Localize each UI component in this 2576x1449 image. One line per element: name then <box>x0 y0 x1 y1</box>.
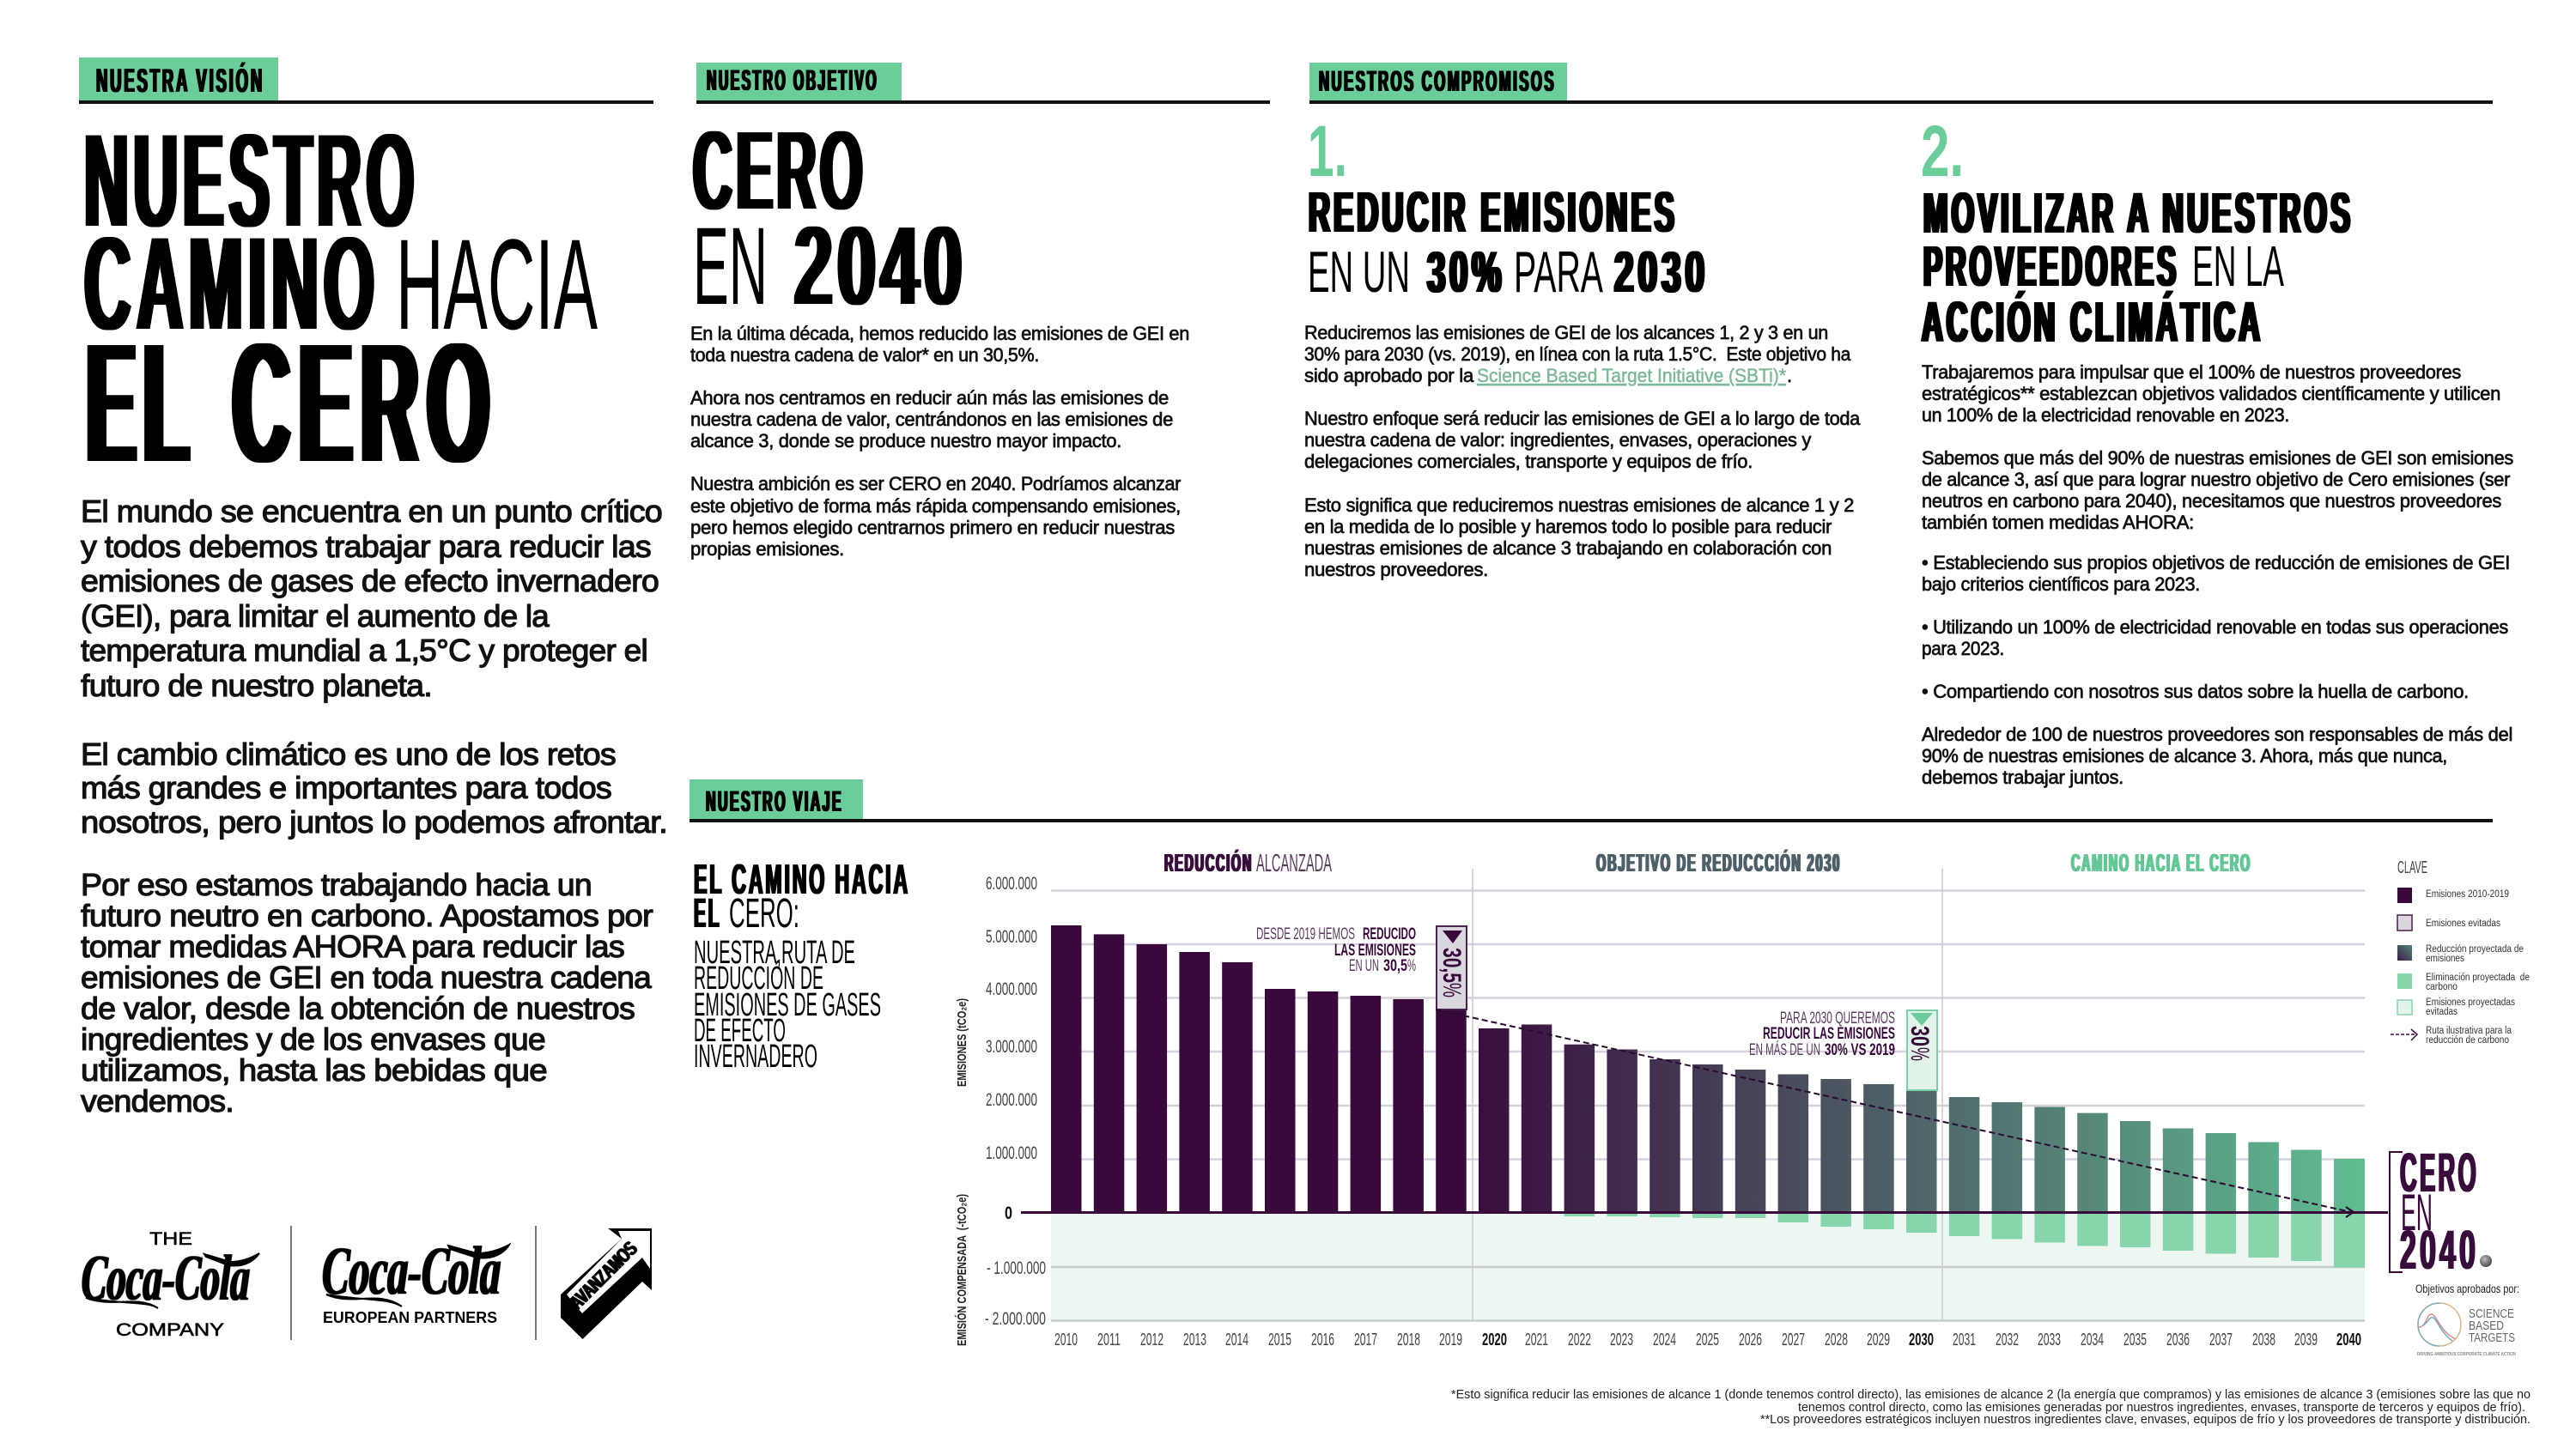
legend: reducción de carbono <box>2426 1035 2509 1046</box>
intro paragraphs: emisiones de GEI en toda nuestra cadena <box>81 960 653 995</box>
commitment 1 text: en la medida de lo posible y haremos todo lo posible para reducir <box>1304 516 1832 537</box>
footnotes: *Esto significa reducir las emisiones de alcance 1 (donde tenemos control directo), las emisiones de alcance 2 (la energía que compramos) y las emisiones de alcance 3 (emisiones sobre las que no <box>1451 1388 2530 1402</box>
commitment 2 text: también tomen medidas AHORA: <box>1922 512 2194 533</box>
commitment 1 text: 30% para 2030 (vs. 2019), en línea con la ruta 1.5°C. Este objetivo ha <box>1304 343 1851 365</box>
chart: year labels: 2011 <box>1097 1331 1121 1349</box>
intro paragraphs: más grandes e importantes para todos <box>81 770 611 805</box>
chart: y axis labels: 4.000.000 <box>986 979 1037 999</box>
objective text: En la última década, hemos reducido las emisiones de GEI en <box>690 323 1189 344</box>
commitment 1 text: Esto significa que reduciremos nuestras emisiones de alcance 1 y 2 <box>1304 494 1854 516</box>
heading: cero en 2040: 2040 <box>794 201 967 330</box>
objective text: toda nuestra cadena de valor* en un 30,5%. <box>690 344 1039 366</box>
commitment 1 heading: PARA <box>1514 239 1603 305</box>
commitment 2 heading <box>1921 111 2354 355</box>
main title: EL <box>87 305 197 501</box>
legend: Reducción proyectada de <box>2426 944 2524 955</box>
chart: year labels: 2023 <box>1610 1331 1633 1349</box>
header: nuestro objetivo <box>696 63 1270 104</box>
chart: rotated axis titles: EMISIÓN COMPENSADA (-tCO₂e) <box>954 1194 969 1346</box>
chart: year labels: 2033 <box>2038 1331 2061 1349</box>
chart: y axis labels <box>985 874 1046 1329</box>
legend: Emisiones evitadas <box>2426 919 2500 929</box>
legend: evitadas <box>2426 1007 2458 1017</box>
commitment 1 text: nuestra cadena de valor: ingredientes, envases, operaciones y <box>1304 429 1811 451</box>
header: nuestro objetivo: NUESTRO OBJETIVO <box>707 64 878 97</box>
logo: avanzamos arrow <box>561 1228 652 1339</box>
chart: year labels: 2017 <box>1354 1331 1377 1349</box>
chart: y axis labels: 1.000.000 <box>986 1143 1037 1163</box>
callout: 30,5% reduction: EN UN <box>1349 957 1379 975</box>
intro paragraphs: utilizamos, hasta las bebidas que <box>81 1052 547 1088</box>
callout: 30% by 2030: 30 <box>1905 1026 1934 1046</box>
chart: y axis labels: 6.000.000 <box>986 874 1037 894</box>
intro paragraphs: futuro neutro en carbono. Apostamos por <box>81 898 653 933</box>
commitment 2 text <box>1922 361 2513 788</box>
intro paragraphs: nosotros, pero juntos lo podemos afrontar. <box>81 804 667 840</box>
divider: logos <box>535 1226 537 1340</box>
chart: section titles: ALCANZADA <box>1256 850 1332 877</box>
chart: year labels <box>1054 1331 2361 1349</box>
commitment 2 text: • Compartiendo con nosotros sus datos sobre la huella de carbono. <box>1922 681 2469 702</box>
logo: science based targets: SCIENCE <box>2469 1307 2514 1321</box>
commitment 1 text: delegaciones comerciales, transporte y equipos de frío. <box>1304 451 1753 472</box>
commitment 2 text: de alcance 3, así que para lograr nuestro objetivo de Cero emisiones (ser <box>1922 469 2510 490</box>
commitment 2 text: para 2023. <box>1922 638 2004 659</box>
objective text: nuestra cadena de valor, centrándonos en las emisiones de <box>690 409 1173 430</box>
chart: rotated axis titles: EMISIONES (tCO₂e) <box>955 998 969 1087</box>
logo: coca-cola european partners: Coca-Cola <box>321 1234 502 1309</box>
chart: year labels: 2022 <box>1568 1331 1591 1349</box>
chart: section titles: OBJETIVO DE REDUCCCIÓN 2030 <box>1596 848 1841 877</box>
commitment 2 text: 90% de nuestras emisiones de alcance 3. Ahora, más que nunca, <box>1922 745 2447 767</box>
target badge: cero en 2040: 2040 <box>2400 1219 2479 1281</box>
intro paragraphs: (GEI), para limitar el aumento de la <box>81 598 550 634</box>
commitment 2 heading: ACCIÓN CLIMÁTICA <box>1922 290 2263 355</box>
commitment 2 text: debemos trabajar juntos. <box>1922 767 2123 788</box>
commitment 2 text: neutros en carbono para 2040), necesitamos que nuestros proveedores <box>1922 490 2501 512</box>
chart: year labels: 2030 <box>1909 1331 1934 1349</box>
intro paragraphs: Por eso estamos trabajando hacia un <box>81 867 592 902</box>
footnotes <box>1451 1388 2530 1427</box>
logo: the coca-cola company: THE <box>149 1229 192 1249</box>
chart: zero axis line <box>1021 1211 2388 1214</box>
footnotes: **Los proveedores estratégicos incluyen nuestros ingredientes clave, envases, equipos de frío y los proveedores de transporte y distribución. <box>1760 1413 2530 1427</box>
callout: 30,5% reduction <box>1256 925 1467 1009</box>
intro paragraphs: ingredientes y de los envases que <box>81 1022 545 1057</box>
header: nuestra visión: NUESTRA VISIÓN <box>96 62 264 100</box>
objective text <box>690 323 1189 560</box>
divider: logos <box>290 1226 292 1340</box>
heading: cero en 2040: EN <box>693 205 768 328</box>
chart intro text: NUESTRA,RUTA DE <box>694 935 855 971</box>
callout: 30,5% reduction: % <box>1437 983 1466 997</box>
chart intro text: DE EFECTO <box>694 1013 786 1049</box>
logo: the coca-cola company: Coca-Cola <box>81 1242 251 1314</box>
commitment 1 text: . <box>1787 365 1792 386</box>
target badge: cero en 2040: EN <box>2401 1184 2433 1241</box>
commitment 1 heading: 1. <box>1308 111 1347 191</box>
commitment 2 heading: EN LA <box>2192 234 2284 299</box>
objective text: propias emisiones. <box>690 538 844 560</box>
chart: year labels: 2016 <box>1311 1331 1334 1349</box>
intro paragraphs: tomar medidas AHORA para reducir las <box>81 929 624 964</box>
chart: year labels: 2039 <box>2294 1331 2318 1349</box>
logo: science based targets: DRIVING AMBITIOUS CORPORATE CLIMATE ACTION <box>2417 1352 2516 1357</box>
chart intro text: REDUCCIÓN DE <box>694 960 823 997</box>
chart: year labels: 2019 <box>1439 1331 1462 1349</box>
chart intro text: INVERNADERO <box>694 1039 817 1075</box>
chart: rotated axis titles <box>954 998 969 1346</box>
chart: year labels: 2015 <box>1268 1331 1291 1349</box>
legend: Eliminación proyectada de <box>2426 973 2530 983</box>
logo: science based targets <box>2417 1303 2516 1357</box>
main title <box>84 104 598 501</box>
approved by label: Objetivos aprobados por: <box>2415 1282 2519 1295</box>
chart: year labels: 2024 <box>1653 1331 1676 1349</box>
chart: y axis labels: 3.000.000 <box>986 1037 1037 1057</box>
objective text: pero hemos elegido centrarnos primero en reducir nuestras <box>690 517 1175 538</box>
logo: coca-cola european partners <box>321 1234 509 1326</box>
commitment 1 text: Reduciremos las emisiones de GEI de los alcances 1, 2 y 3 en un <box>1304 322 1828 343</box>
commitment 2 text: • Utilizando un 100% de electricidad renovable en todas sus operaciones <box>1922 616 2508 638</box>
footnotes: tenemos control directo, como las emisiones generadas por nuestros ingredientes, envases, transporte de terceros y equipos de frío). <box>1798 1401 2525 1415</box>
objective text: Ahora nos centramos en reducir aún más las emisiones de <box>690 387 1169 409</box>
logo: avanzamos arrow: AVANZAMOS <box>565 1237 642 1314</box>
chart: year labels: 2013 <box>1183 1331 1206 1349</box>
chart: year labels: 2010 <box>1054 1331 1078 1349</box>
chart: section titles: REDUCCIÓN <box>1164 848 1253 877</box>
chart: y axis labels: 0 <box>1005 1203 1012 1223</box>
text: CAMINO HACIA EL CERO <box>2071 850 2251 877</box>
chart: year labels: 2014 <box>1225 1331 1249 1349</box>
commitment 1 text: Nuestro enfoque será reducir las emisiones de GEI a lo largo de toda <box>1304 408 1861 429</box>
legend: Emisiones proyectadas <box>2426 997 2515 1008</box>
commitment 2 text: Trabajaremos para impulsar que el 100% de nuestros proveedores <box>1922 361 2461 383</box>
callout: 30% by 2030 <box>1749 1009 1937 1090</box>
heading: cero en 2040 <box>693 106 967 330</box>
chart: y axis labels: - 2.000.000 <box>985 1309 1046 1329</box>
objective text: Nuestra ambición es ser CERO en 2040. Podríamos alcanzar <box>690 473 1181 494</box>
commitment 1 text: sido aprobado por la <box>1304 365 1474 386</box>
header: nuestros compromisos <box>1309 63 2493 104</box>
logo: the coca-cola company: COMPANY <box>116 1320 224 1340</box>
callout: 30% by 2030: REDUCIR LAS EMISIONES <box>1763 1025 1895 1043</box>
callout: 30,5% reduction: REDUCIDO <box>1363 925 1416 943</box>
intro paragraphs: El mundo se encuentra en un punto crítico <box>81 494 662 529</box>
header: nuestro viaje <box>690 779 2493 822</box>
main title: CERO <box>233 305 498 501</box>
commitment 2 heading: 2. <box>1921 111 1964 191</box>
logo: the coca-cola company <box>81 1229 259 1340</box>
main title: CAMINO <box>84 207 380 360</box>
logo: science based targets: TARGETS <box>2469 1331 2515 1345</box>
commitment 1 heading <box>1308 111 1709 305</box>
callout: 30,5% reduction: % <box>1407 957 1416 975</box>
legend: carbono <box>2426 982 2458 992</box>
header: nuestro viaje: NUESTRO VIAJE <box>706 785 843 818</box>
commitment 2 heading: PROVEEDORES <box>1923 234 2179 299</box>
chart: year labels: 2034 <box>2081 1331 2104 1349</box>
callout: 30,5% reduction: LAS EMISIONES <box>1334 942 1416 960</box>
objective text: este objetivo de forma más rápida compensando emisiones, <box>690 495 1181 517</box>
chart: y axis labels: - 1.000.000 <box>987 1258 1046 1278</box>
chart intro text: CERO: <box>729 891 799 937</box>
chart: year labels: 2032 <box>1996 1331 2019 1349</box>
chart intro text: EL <box>694 891 721 937</box>
chart: section titles <box>1164 848 2251 877</box>
callout: 30% by 2030: EN MÁS DE UN <box>1749 1041 1820 1059</box>
legend: CLAVE <box>2397 858 2427 877</box>
commitment 2 text: bajo criterios científicos para 2023. <box>1922 573 2200 595</box>
objective text: alcance 3, donde se produce nuestro mayor impacto. <box>690 430 1121 452</box>
callout: 30,5% reduction: 30,5 <box>1437 948 1466 983</box>
commitment 1 text <box>1304 322 1861 580</box>
chart: year labels: 2037 <box>2209 1331 2233 1349</box>
intro paragraphs: El cambio climático es uno de los retos <box>81 737 616 772</box>
intro paragraphs: vendemos. <box>81 1083 234 1119</box>
commitment 1 heading: EN UN <box>1308 239 1410 305</box>
commitment 1 heading: 2030 <box>1614 239 1709 305</box>
text: EL CAMINO HACIA <box>694 857 910 903</box>
legend: emisiones <box>2426 954 2464 964</box>
legend <box>2391 858 2530 1046</box>
chart: year labels: 2029 <box>1867 1331 1890 1349</box>
chart: year labels: 2026 <box>1739 1331 1762 1349</box>
callout: 30% by 2030: % <box>1905 1047 1934 1061</box>
chart: year labels: 2012 <box>1140 1331 1163 1349</box>
commitment 2 text: estratégicos** establezcan objetivos validados científicamente y utilicen <box>1922 383 2500 404</box>
chart: year labels: 2036 <box>2166 1331 2190 1349</box>
callout: 30,5% reduction: DESDE 2019 HEMOS <box>1256 925 1355 943</box>
commitment 1 text: Science Based Target Initiative (SBTi)* <box>1477 365 1786 386</box>
commitment 1 heading: 30% <box>1427 239 1505 305</box>
bars: projected carbon removal <box>1564 1212 2365 1267</box>
commitment 1 heading: REDUCIR EMISIONES <box>1309 180 1678 245</box>
intro paragraphs: de valor, desde la obtención de nuestros <box>81 991 635 1026</box>
legend: Emisiones 2010-2019 <box>2426 889 2509 900</box>
intro paragraphs <box>81 494 667 1119</box>
chart: year labels: 2018 <box>1397 1331 1420 1349</box>
commitment 2 text: Sabemos que más del 90% de nuestras emisiones de GEI son emisiones <box>1922 447 2513 469</box>
target badge: cero en 2040 <box>2390 1142 2492 1281</box>
chart intro text <box>694 857 910 1075</box>
intro paragraphs: y todos debemos trabajar para reducir las <box>81 529 651 564</box>
chart: year labels: 2025 <box>1696 1331 1719 1349</box>
chart: y axis labels: 2.000.000 <box>986 1090 1037 1110</box>
chart: background band and grid <box>1051 869 2365 1321</box>
logo: coca-cola european partners: EUROPEAN PARTNERS <box>323 1309 497 1326</box>
chart: year labels: 2021 <box>1525 1331 1548 1349</box>
bars: emissions 2010-2019 <box>1051 925 1467 1212</box>
commitment 1 text: nuestras emisiones de alcance 3 trabajando en colaboración con <box>1304 537 1832 559</box>
header: nuestra visión <box>79 58 653 104</box>
intro paragraphs: futuro de nuestro planeta. <box>81 668 432 703</box>
callout: 30% by 2030: 30% VS 2019 <box>1825 1041 1895 1059</box>
bars: projected emissions 2020-2040 <box>1479 1025 2365 1212</box>
chart: year labels: 2038 <box>2252 1331 2275 1349</box>
commitment 1 text: nuestros proveedores. <box>1304 559 1488 580</box>
arrow: illustrative reduction path <box>1436 1009 2354 1217</box>
chart: year labels: 2028 <box>1825 1331 1848 1349</box>
main title: NUESTRO <box>84 104 419 257</box>
chart: year labels: 2020 <box>1482 1331 1507 1349</box>
chart: y axis labels: 5.000.000 <box>986 927 1037 947</box>
callout: 30,5% reduction: 30,5 <box>1383 957 1407 975</box>
commitment 2 text: • Estableciendo sus propios objetivos de reducción de emisiones de GEI <box>1922 552 2510 573</box>
intro paragraphs: emisiones de gases de efecto invernadero <box>81 563 659 598</box>
chart: year labels: 2035 <box>2123 1331 2147 1349</box>
legend: Ruta ilustrativa para la <box>2426 1026 2512 1036</box>
intro paragraphs: temperatura mundial a 1,5°C y proteger el <box>81 633 647 668</box>
heading: cero en 2040: CERO <box>693 106 866 235</box>
chart: year labels: 2040 <box>2336 1331 2361 1349</box>
header: nuestros compromisos: NUESTROS COMPROMISOS <box>1319 65 1556 98</box>
commitment 2 text: un 100% de la electricidad renovable en 2023. <box>1922 404 2289 426</box>
commitment 2 text: Alrededor de 100 de nuestros proveedores son responsables de más del <box>1922 724 2512 745</box>
main title: HACIA <box>396 212 598 356</box>
chart: year labels: 2027 <box>1782 1331 1805 1349</box>
logo: science based targets: BASED <box>2469 1319 2504 1333</box>
chart intro text: EMISIONES DE GASES <box>694 987 881 1023</box>
chart: year labels: 2031 <box>1953 1331 1976 1349</box>
callout: 30% by 2030: PARA 2030 QUEREMOS <box>1780 1009 1895 1028</box>
